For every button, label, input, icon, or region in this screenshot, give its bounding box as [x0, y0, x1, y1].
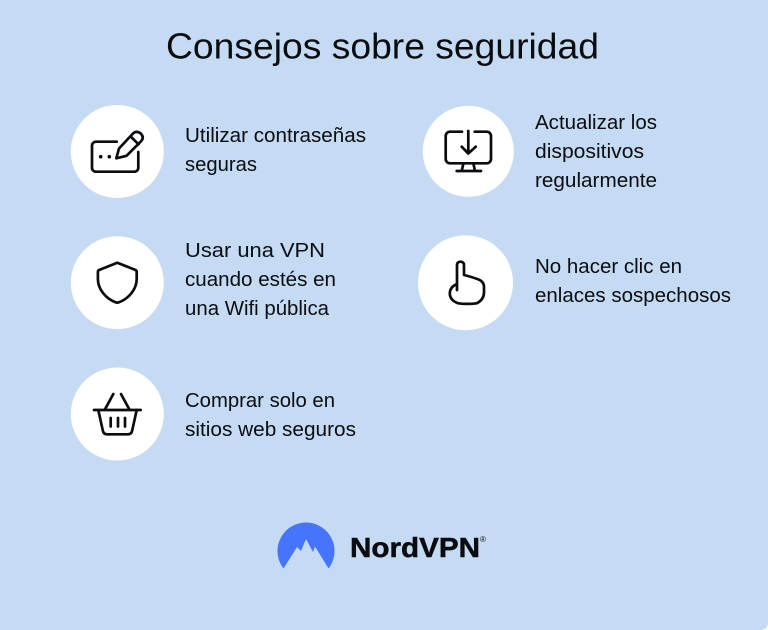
tip text	[535, 112, 657, 192]
tip text: cuando estés en	[185, 269, 336, 291]
icon: NordVPN mountain dome	[277, 523, 334, 568]
tip text: No hacer clic en	[535, 256, 682, 278]
tip: buy only on secure sites	[71, 368, 356, 460]
title: Consejos sobre seguridad	[166, 26, 599, 66]
tip: do not click suspicious links	[418, 235, 731, 330]
tip text: Utilizar contraseñas	[185, 125, 366, 147]
tip text: Comprar solo en	[185, 390, 335, 412]
tip text: seguras	[185, 154, 257, 176]
icon: monitor with download arrow	[423, 106, 514, 197]
tip text: una Wifi pública	[185, 298, 330, 320]
tip text: dispositivos	[535, 141, 644, 163]
icon: shopping basket	[71, 368, 164, 460]
tip text: regularmente	[535, 170, 657, 192]
tip: update devices	[423, 106, 657, 197]
registered mark: ®	[480, 535, 486, 544]
tip text: sitios web seguros	[185, 419, 356, 441]
tip: use a VPN on public Wi-Fi	[71, 236, 336, 329]
tip text	[185, 125, 366, 176]
icon: pointing hand	[418, 235, 513, 330]
icon: password field with pencil	[71, 105, 164, 198]
tip: strong passwords	[71, 105, 366, 198]
tip text: Usar una VPN	[185, 240, 325, 262]
wordmark: NordVPN	[350, 532, 480, 563]
NordVPN logo	[277, 523, 486, 568]
tip text: enlaces sospechosos	[535, 285, 731, 307]
tip text	[185, 390, 356, 441]
tip text	[535, 256, 731, 307]
tip text: Actualizar los	[535, 112, 657, 134]
tip text	[185, 240, 336, 320]
icon: shield	[71, 236, 164, 329]
